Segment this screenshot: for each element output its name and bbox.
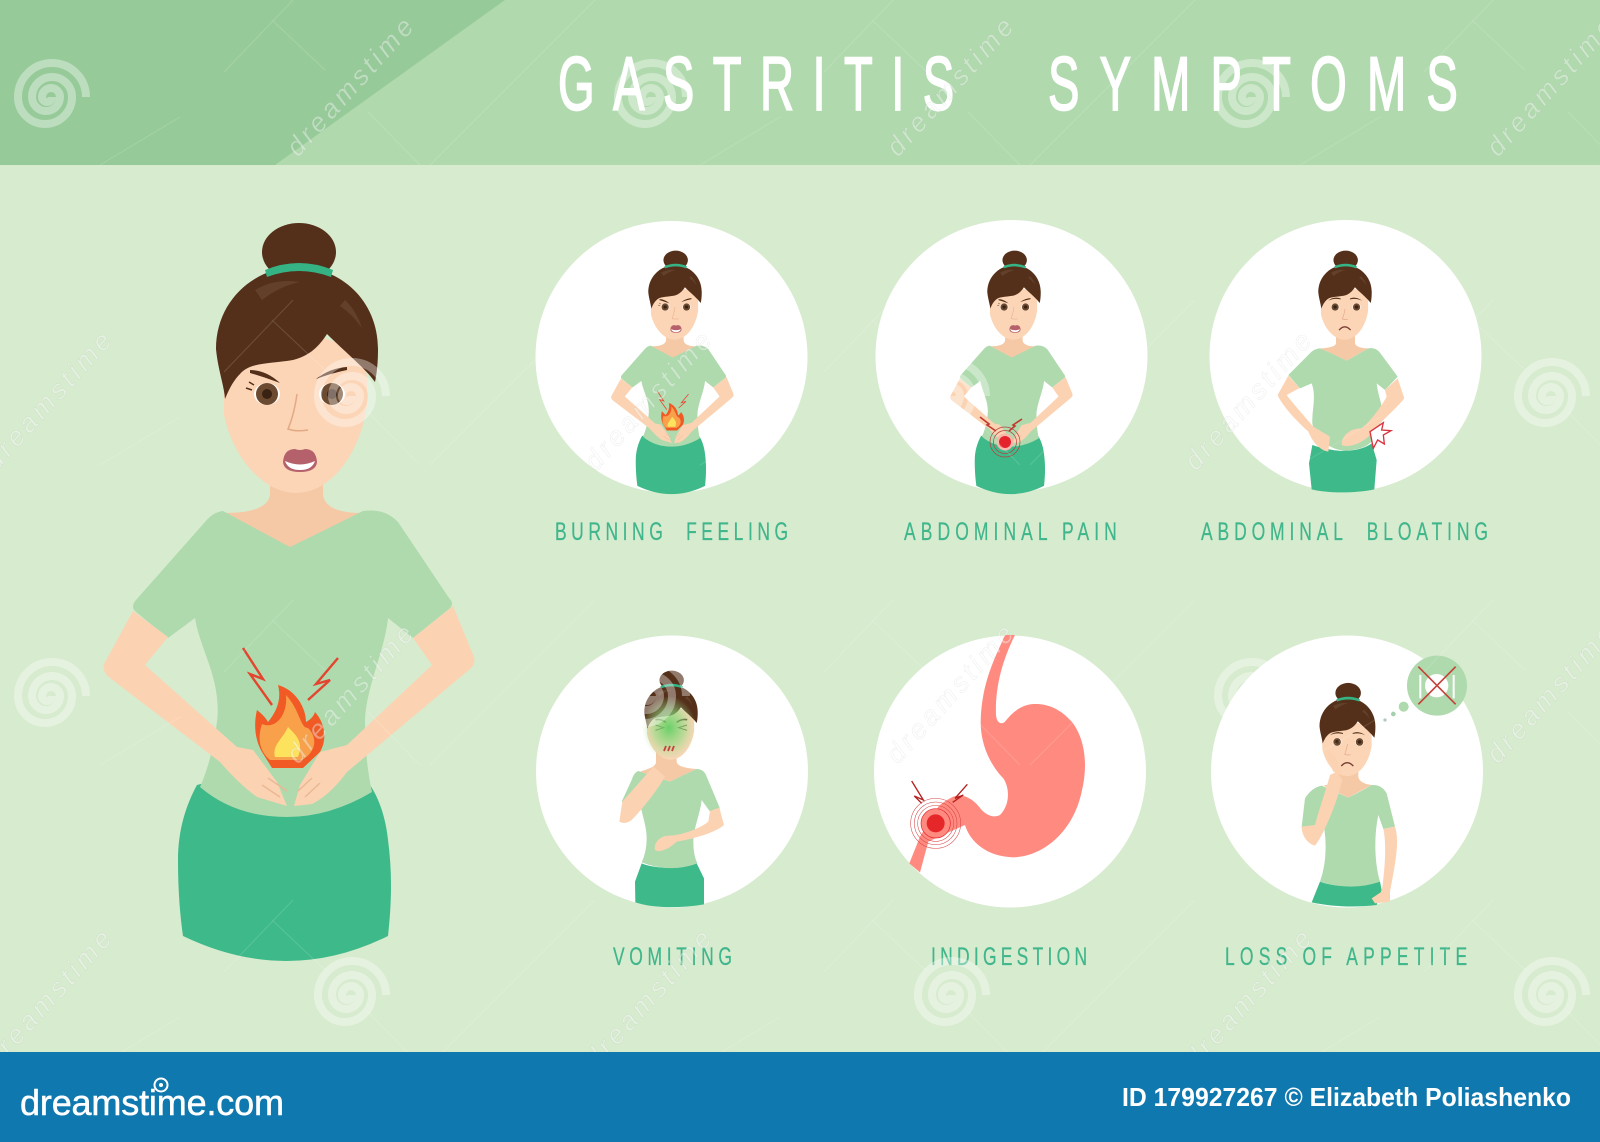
label: loss of appetite: LOSS OF APPETITE: [1225, 942, 1467, 971]
woman with abdominal pain: [950, 251, 1073, 494]
icon: flame and lightning: [243, 648, 338, 768]
hands on stomach: [104, 606, 474, 806]
label: burning feeling: BURNING FEELING: [555, 517, 788, 546]
label: abdominal pain: ABDOMINAL PAIN: [904, 517, 1117, 546]
figure body and head: [133, 223, 452, 961]
panel: burning feeling: [536, 221, 808, 494]
circle: [1211, 636, 1483, 908]
circle: [876, 220, 1148, 492]
watermark text: dreamstime: [280, 619, 420, 769]
footer credit: ID 179927267 © Elizabeth Poliashenko: [1122, 1082, 1571, 1112]
label: abdominal bloating: ABDOMINAL BLOATING: [1201, 517, 1488, 546]
footer bar: [0, 1052, 1600, 1142]
panel: indigestion: [874, 635, 1146, 908]
header corner triangle: [0, 0, 505, 165]
watermark text: dreamstime: [578, 924, 718, 1074]
watermark text: dreamstime: [578, 326, 718, 476]
watermark text: dreamstime: [880, 12, 1020, 162]
woman feeling sick: [619, 671, 724, 907]
panel: abdominal bloating: [1210, 220, 1482, 492]
title: [558, 43, 1458, 127]
watermark text: dreamstime: [1178, 326, 1318, 476]
watermark text: dreamstime: [280, 12, 420, 162]
panel: loss of appetite: [1211, 636, 1483, 908]
title: SYMPTOMS: [1048, 43, 1458, 127]
header band: [0, 0, 1600, 165]
title: GASTRITIS: [558, 43, 954, 127]
mouth stripes: [664, 746, 674, 751]
watermark text: dreamstime: [880, 619, 1020, 769]
label: indigestion: INDIGESTION: [931, 942, 1087, 971]
footer logo: dreamstime.com: [20, 1082, 284, 1123]
label: vomiting: VOMITING: [613, 942, 732, 971]
circle: [874, 636, 1146, 908]
woman with flame: [611, 251, 734, 494]
woman with hand to cheek: [1302, 683, 1397, 906]
main figure: woman with burning stomach: [104, 223, 474, 961]
woman with bloated belly: [1278, 251, 1404, 492]
icon: pain point: [980, 417, 1022, 457]
stomach illustration: [909, 635, 1085, 872]
panel: abdominal pain: [876, 220, 1148, 494]
circle: [1210, 220, 1482, 492]
panel: vomiting: [536, 636, 808, 908]
face: [246, 367, 347, 472]
thought bubble: no food: [1383, 656, 1467, 722]
sick green face overlay: [642, 696, 696, 760]
watermark text: dreamstime: [1178, 924, 1318, 1074]
icon: pain point: [911, 781, 967, 848]
circle: [536, 636, 808, 908]
circle: [536, 221, 808, 493]
